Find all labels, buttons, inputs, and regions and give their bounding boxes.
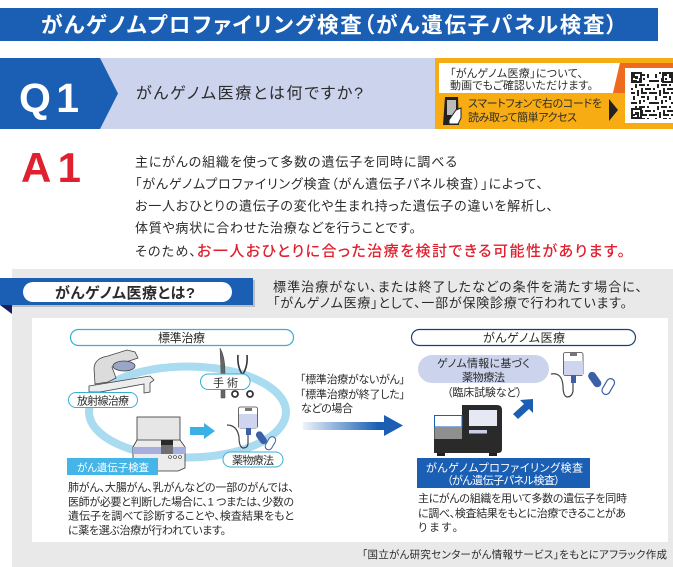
surgery label: 手術 [213, 376, 238, 390]
icon: smartphone in hand [443, 97, 461, 125]
condition text: などの場合 [301, 402, 353, 415]
drug therapy label [223, 452, 283, 467]
radiotherapy label [68, 392, 138, 408]
title bar: がんゲノムプロファイリング検査（がん遺伝子パネル検査） [41, 12, 617, 38]
callout instruction text: スマートフォンで右のコードを [468, 96, 602, 110]
QR code [625, 68, 673, 123]
icon: genetic test analyzer [133, 417, 185, 471]
large gradient arrow [303, 415, 403, 436]
answer text block: お一人おひとりの遺伝子の変化や生まれ持った遺伝子の違いを解析し、 [135, 198, 553, 214]
condition text [300, 372, 405, 415]
standard treatment heading [70, 330, 294, 346]
genome-based drug therapy bubble: 薬物療法 [462, 370, 505, 384]
icon: radiotherapy machine [89, 350, 154, 393]
question text: がんゲノム医療とは何ですか? [136, 84, 363, 102]
standard treatment description: 肺がん、大腸がん、乳がんなどの一部のがんでは、 [68, 480, 294, 494]
gene test label: がん遺伝子検査 [77, 461, 150, 474]
section heading tab [0, 278, 255, 314]
white diagram panel [32, 318, 668, 542]
standard treatment description [68, 480, 294, 537]
answer text block: そのため、 [135, 244, 196, 259]
standard treatment description: に薬を選ぶ治療が行われています。 [68, 523, 226, 537]
section intro text: 標準治療がない、または終了したなどの条件を満たす場合に、 [273, 280, 642, 294]
gene test label [67, 458, 158, 475]
treatment cycle ring [89, 366, 286, 458]
callout white message box [439, 63, 673, 93]
condition text: 「標準治療がないがん」 [300, 372, 405, 386]
section heading tab: がんゲノム医療とは? [55, 284, 195, 302]
section intro text [273, 280, 642, 310]
genomic profiling test label: がんゲノムプロファイリング検査 [426, 460, 583, 474]
callout white message box: 動画でもご確認いただけます。 [450, 78, 593, 92]
A1 label: A1 [21, 144, 81, 191]
standard treatment heading: 標準治療 [158, 330, 205, 345]
answer text block: 体質や病状に合わせた治療などを行うことです。 [135, 220, 416, 236]
surgery label [200, 374, 250, 390]
condition text: 「標準治療が終了した」 [300, 387, 405, 401]
genomic medicine description [418, 491, 627, 534]
drug therapy label: 薬物療法 [232, 453, 274, 467]
answer text block: お一人おひとりに合った治療を検討できる可能性があります。 [197, 242, 625, 260]
arrow: test to drug therapy [190, 423, 215, 439]
panel: what is genomic medicine [0, 269, 673, 567]
icon: surgical tools [220, 348, 253, 398]
section intro text: 「がんゲノム医療」として、一部が保険診療で行われています。 [273, 296, 627, 310]
genomic profiling test label [417, 458, 590, 488]
icon: IV drip and capsules [227, 407, 277, 451]
arrow: panel test to therapy [513, 399, 533, 419]
arrow to QR code [609, 99, 618, 121]
title bar [0, 8, 658, 41]
callout white message box: 「がんゲノム医療」について、 [450, 66, 583, 80]
callout instruction text: 読み取って簡単アクセス [468, 110, 577, 124]
answer text block: 主にがんの組織を使って多数の遺伝子を同時に調べる [135, 154, 457, 170]
genomic medicine description: ります。 [418, 521, 458, 534]
genomic medicine description: 主にがんの組織を用いて多数の遺伝子を同時 [418, 491, 627, 505]
genome-based drug therapy bubble: ゲノム情報に基づく [437, 357, 530, 370]
genomic medicine heading: がんゲノム医療 [483, 330, 565, 345]
standard treatment description: 遺伝子を調べて診断することや、検査結果をもと [68, 508, 294, 522]
question banner: Q1 [0, 58, 436, 129]
video QR callout [435, 58, 673, 129]
Q1 arrow badge: Q1 [19, 75, 79, 121]
genome-based drug therapy bubble [418, 355, 549, 399]
genome-based drug therapy bubble: （臨床試験など） [447, 385, 522, 399]
callout instruction text [468, 96, 602, 124]
genomic profiling test label: （がん遺伝子パネル検査） [447, 473, 560, 487]
icon: genomic profiling machine [434, 405, 502, 456]
Q1 arrow badge [0, 58, 118, 129]
standard treatment description: 医師が必要と判断した場合に、1 つまたは、少数の [68, 494, 294, 508]
answer text block [135, 154, 625, 260]
source citation: 「国立がん研究センターがん情報サービス」をもとにアフラック作成 [362, 548, 668, 561]
answer text block: 「がんゲノムプロファイリング検査（がん遺伝子パネル検査）」によって、 [135, 176, 543, 192]
genomic medicine heading [412, 330, 636, 346]
radiotherapy label: 放射線治療 [77, 394, 129, 408]
genomic medicine description: に調べ、検査結果をもとに治療できることがあ [418, 506, 626, 520]
icon: IV drip and capsules (genomic) [551, 352, 616, 397]
